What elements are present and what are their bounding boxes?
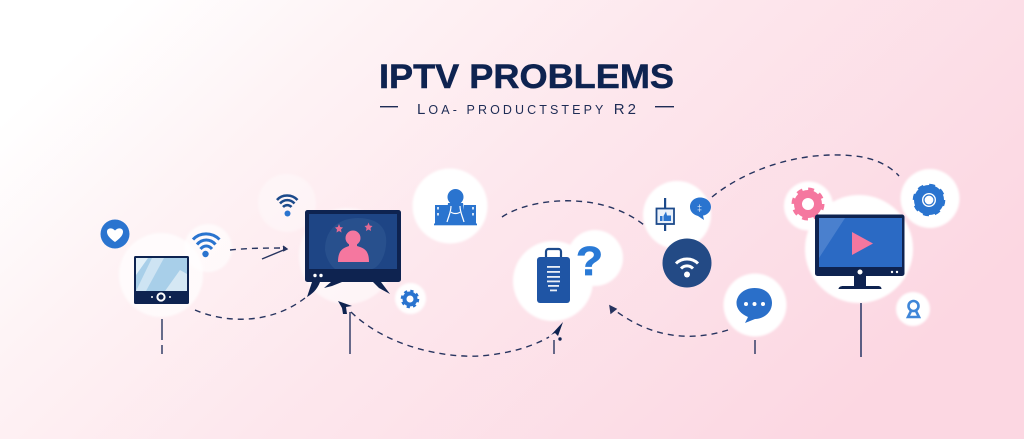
stem: tablet xyxy=(161,319,163,354)
subtitle: LOA- PRODUCTSTEPY R2 xyxy=(417,101,636,118)
stem: TV xyxy=(349,312,351,354)
icon: TV with person xyxy=(305,210,401,297)
connector: person icon to box icon xyxy=(502,201,644,225)
dashed connectors xyxy=(162,155,899,357)
icon: small chat bubble: ‡ xyxy=(697,203,702,213)
icon: wifi badge xyxy=(662,238,712,288)
stem: suitcase xyxy=(553,340,555,354)
icon: wifi blue xyxy=(193,234,220,257)
icon: tablet device xyxy=(134,256,189,304)
connector: tablet to wifi arrow xyxy=(230,246,287,259)
icon: pink gear xyxy=(794,190,822,218)
connector: tablet to TV xyxy=(195,298,305,319)
icon: chat bubble xyxy=(736,288,772,323)
title: IPTV PROBLEMS xyxy=(379,58,674,96)
connector: chat to question xyxy=(612,308,728,336)
icon: question mark: ? xyxy=(576,238,603,284)
icon: small gear xyxy=(402,292,418,306)
arrow head: suitcase xyxy=(551,322,563,336)
arrow head: TV xyxy=(338,301,352,314)
icon: location ring xyxy=(908,301,919,317)
dot near suitcase arrow xyxy=(558,337,562,341)
icon: person at desk xyxy=(434,189,477,225)
icon: blue gear xyxy=(914,186,944,214)
icon: box with thumb xyxy=(656,198,674,231)
stem: monitor xyxy=(860,303,862,357)
connector: box icon to gear xyxy=(712,155,899,197)
connector: suitcase to TV xyxy=(351,312,549,356)
icon: heart xyxy=(100,220,130,248)
icon: monitor with play xyxy=(815,214,904,289)
white halo circles xyxy=(119,168,960,336)
icon: wifi navy xyxy=(277,196,298,216)
icon: small chat bubble xyxy=(690,198,711,220)
stem: chat xyxy=(754,340,756,354)
icon: suitcase xyxy=(537,249,570,303)
arrow head: question xyxy=(610,306,616,313)
